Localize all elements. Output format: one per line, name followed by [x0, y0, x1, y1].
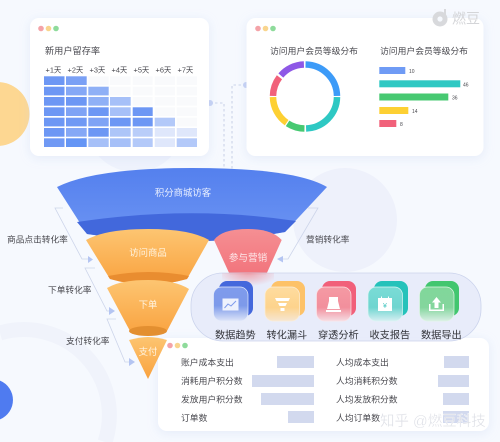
day labels: +4天 — [112, 66, 128, 74]
funnel glow — [222, 273, 274, 295]
tool labels: 数据导出 — [421, 328, 462, 342]
icon: data export — [420, 281, 459, 321]
day labels — [46, 66, 194, 74]
bar chart: 36 — [452, 96, 458, 102]
funnel: visit products: 访问商品 — [129, 247, 167, 258]
heading: donut: 访问用户会员等级分布 — [270, 45, 358, 56]
funnel: visitors — [57, 168, 327, 242]
label: product click rate: 商品点击转化率 — [7, 234, 68, 244]
tool labels: 穿透分析 — [318, 328, 359, 342]
left metric labels: 账户成本支出 — [181, 356, 234, 368]
funnel: order: 下单 — [139, 299, 157, 310]
tool labels: 数据趋势 — [215, 328, 256, 342]
background ring: bottom left — [0, 330, 109, 442]
right metric labels — [336, 356, 398, 423]
bar chart: 14 — [412, 109, 418, 115]
logo: watermark top right: 燃豆 — [452, 10, 480, 26]
left metric labels: 订单数 — [181, 412, 208, 423]
day labels: +6天 — [156, 66, 172, 74]
left metric labels: 消耗用户积分数 — [181, 375, 243, 386]
bar chart: 10 — [409, 69, 415, 75]
funnel: pay — [129, 337, 167, 379]
label: marketing rate: 营销转化率 — [306, 234, 350, 244]
tool labels: 收支报告 — [370, 328, 410, 342]
window dots — [167, 343, 188, 348]
panel: new user retention — [30, 18, 209, 156]
donut chart — [273, 64, 337, 128]
funnel: order — [107, 280, 189, 336]
left metric labels — [181, 356, 243, 423]
background circle: behind left card — [85, 72, 185, 172]
arrow: marketing rate — [277, 208, 318, 262]
day labels: +5天 — [134, 66, 150, 74]
window dots — [38, 26, 59, 31]
arrow: product click rate — [55, 208, 93, 263]
right metric labels: 人均订单数 — [336, 412, 380, 423]
left metric bars — [252, 356, 314, 423]
background circle: right of funnel — [293, 168, 397, 272]
background circle: yellow — [0, 82, 29, 146]
window dots — [255, 26, 276, 31]
logo: watermark top right — [432, 9, 480, 26]
icon: revenue report: ¥ — [383, 303, 387, 310]
left metric labels: 发放用户积分数 — [181, 394, 243, 404]
right metric labels: 人均成本支出 — [336, 356, 389, 368]
bar chart: 46 — [463, 82, 469, 88]
icon: penetration analysis — [316, 281, 356, 321]
panel: member level distribution — [246, 18, 484, 156]
tool labels — [215, 328, 462, 342]
right metric bars — [438, 356, 469, 423]
arrow: order rate — [85, 268, 115, 315]
connector: dashed lines between cards and funnel — [207, 82, 249, 170]
heading: 新用户留存率 — [45, 45, 100, 56]
funnel: marketing — [214, 229, 282, 275]
heading: bars: 访问用户会员等级分布 — [380, 45, 468, 56]
icon: revenue report — [368, 281, 408, 321]
day labels: +1天 — [46, 66, 62, 74]
bar chart: 8 — [400, 122, 403, 128]
watermark: 知乎 @燃豆科技 — [380, 412, 486, 430]
funnel: visit products — [86, 229, 209, 284]
day labels: +2天 — [68, 66, 84, 74]
arrow: pay rate — [107, 319, 135, 366]
icon: data trend — [214, 281, 253, 321]
funnel: visitors: 积分商城访客 — [155, 187, 212, 198]
right metric labels: 人均发放积分数 — [336, 394, 398, 404]
funnel: pay: 支付 — [139, 346, 157, 357]
label: pay rate: 支付转化率 — [66, 335, 110, 346]
tool labels: 转化漏斗 — [266, 328, 307, 342]
day labels: +3天 — [90, 66, 106, 74]
right metric labels: 人均消耗积分数 — [336, 375, 398, 386]
bar chart — [379, 67, 469, 128]
label: order rate: 下单转化率 — [48, 284, 92, 295]
panel: analysis tools — [191, 273, 481, 342]
icon: funnel — [265, 281, 305, 321]
day labels: +7天 — [178, 66, 194, 74]
background circle: blue — [0, 381, 13, 419]
panel: metrics table — [158, 338, 489, 431]
heatmap — [44, 76, 197, 147]
funnel: marketing: 参与营销 — [229, 252, 268, 264]
